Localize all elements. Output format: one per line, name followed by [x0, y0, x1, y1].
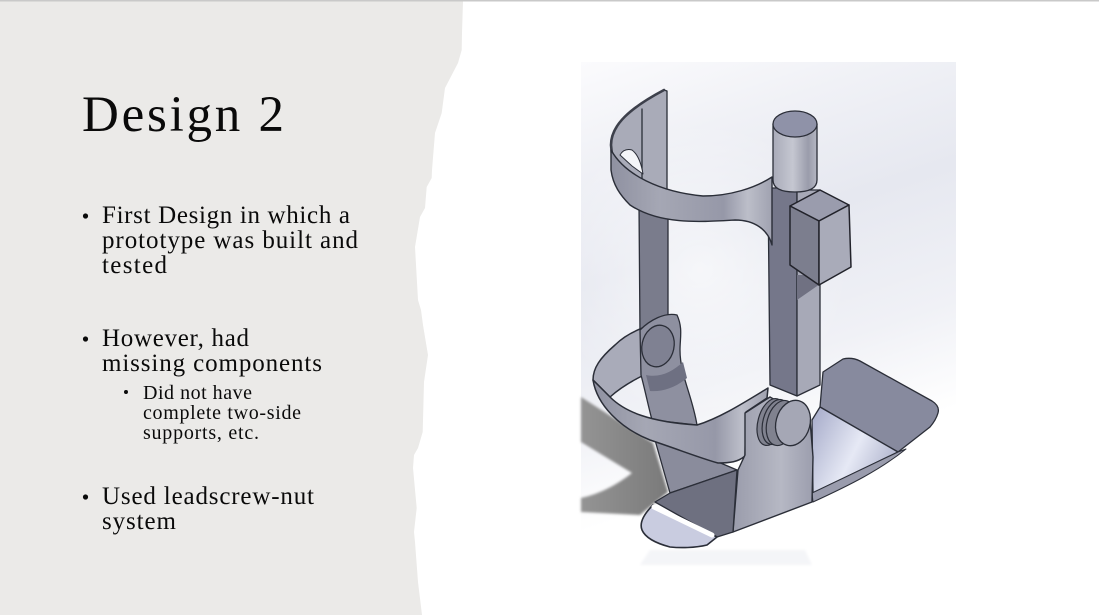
foot front dark surface	[655, 470, 737, 537]
right hinge disk	[771, 396, 815, 450]
bullet: leadscrew-nut: system	[102, 508, 177, 535]
left hinge disk	[638, 322, 678, 370]
upper cuff rim	[611, 90, 664, 155]
right column	[768, 188, 820, 396]
text block: bullet list	[83, 202, 359, 535]
nut housing box	[790, 190, 851, 285]
bullet: leadscrew-nut	[83, 483, 314, 535]
sub-bullet: two-side supports	[124, 382, 301, 444]
column shadow band	[797, 275, 820, 300]
cylinder motor	[773, 111, 817, 192]
bullet: leadscrew-nut: Used leadscrew-nut	[102, 483, 314, 510]
lower left strut	[640, 314, 697, 425]
sub-bullet: two-side supports: complete two-side	[143, 402, 301, 424]
bullet: missing components: However, had	[102, 325, 250, 352]
toe plate	[641, 505, 717, 548]
column left face	[768, 188, 797, 396]
image center glow	[581, 62, 956, 565]
foot far plate	[820, 358, 938, 452]
lower cuff back surface	[593, 317, 677, 397]
upper cuff front band	[611, 150, 772, 245]
sub-bullet: two-side supports: supports, etc.	[143, 422, 259, 444]
bullet: first design	[83, 202, 359, 279]
sub-bullet: two-side supports: Did not have	[143, 382, 252, 404]
floor reflection	[640, 550, 812, 565]
toe highlight	[654, 507, 712, 535]
box top	[790, 190, 849, 221]
lower strut dark band	[646, 362, 687, 391]
upper cuff opening	[620, 150, 643, 174]
bullet: missing components	[83, 325, 322, 377]
bullet: missing components: missing components	[102, 350, 322, 377]
ankle band	[733, 397, 813, 532]
upper cuff back surface	[611, 90, 667, 192]
foot front rim	[812, 449, 906, 502]
cylinder top	[773, 111, 817, 137]
box left face	[790, 206, 819, 285]
inner ring	[762, 397, 800, 449]
cylinder body	[773, 124, 817, 192]
panel: torn paper background	[0, 2, 463, 615]
middle ring	[757, 396, 795, 448]
outer ring	[752, 395, 790, 449]
top border line	[0, 0, 1099, 2]
right hinge rings	[752, 395, 800, 449]
bullet: first design: prototype was built and	[102, 227, 358, 254]
bullet: first design: tested	[102, 252, 168, 279]
title: Design 2	[82, 87, 284, 143]
image background	[581, 62, 956, 565]
floor shadow	[581, 397, 668, 515]
image: CAD model of leg brace	[581, 62, 956, 565]
box right face	[819, 205, 851, 285]
column right face	[797, 190, 820, 396]
left post	[639, 205, 668, 335]
lower cuff front band	[593, 380, 768, 463]
bullet: first design: First Design in which a	[102, 202, 350, 229]
foot near plate	[812, 407, 898, 493]
upper cuff inner seam	[641, 109, 643, 182]
lower strut below cuff	[655, 440, 737, 493]
